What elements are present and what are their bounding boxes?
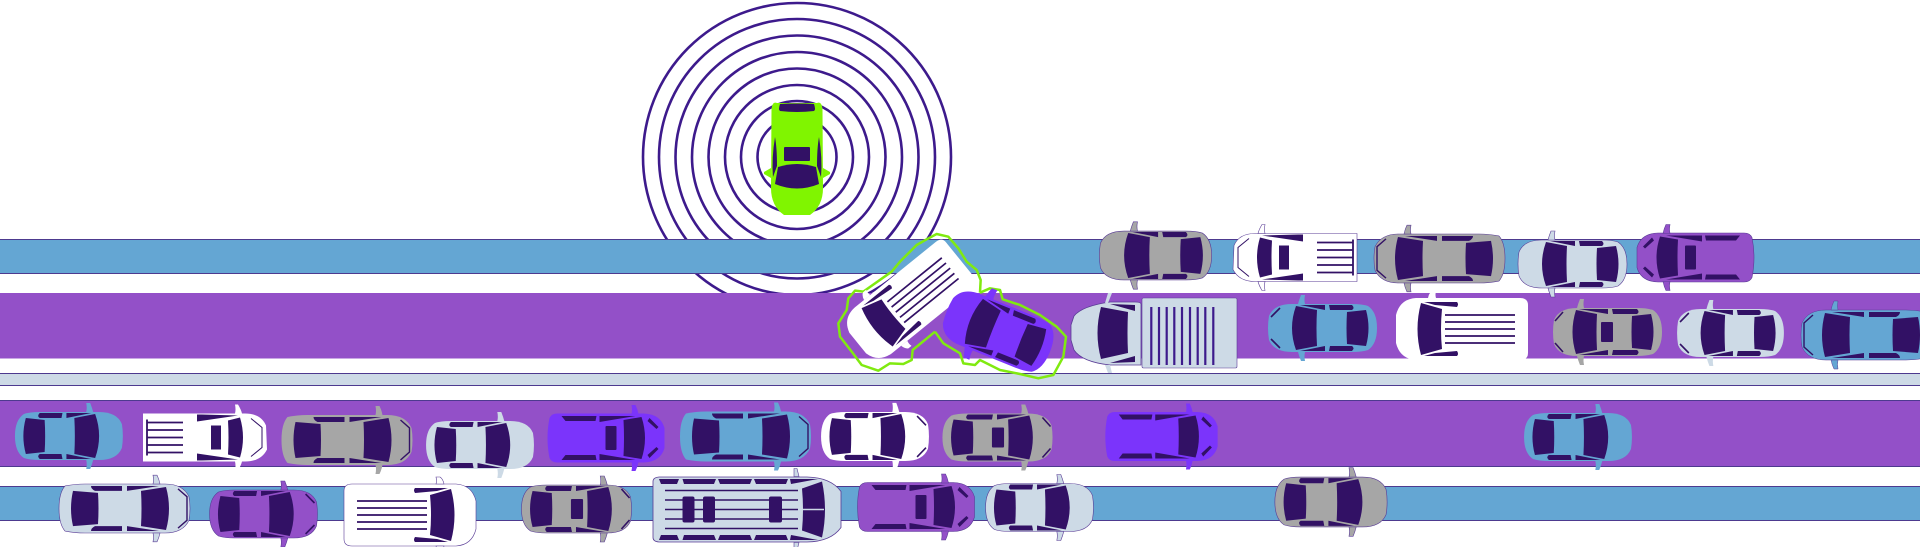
second lane: light sedan <box>1677 300 1784 366</box>
top blue lane: light sedan <box>1518 231 1627 297</box>
second lane: grey car with sunroof <box>1553 299 1662 365</box>
third lane: white pickup <box>143 404 267 470</box>
signal rings <box>643 3 951 311</box>
third lane: light sedan <box>426 412 534 478</box>
bottom lane: light sedan <box>986 474 1093 540</box>
bottom lane: grey sedan <box>1275 468 1387 536</box>
top blue lane: grey sedan <box>1099 222 1212 289</box>
third lane: bright purple van <box>548 405 664 471</box>
bottom lane: long passenger van <box>653 468 841 547</box>
second lane: white SUV <box>1396 291 1528 367</box>
top blue lane: grey SUV <box>1374 225 1505 292</box>
collision: white SUV <box>835 232 983 371</box>
delivery truck <box>1071 293 1237 373</box>
truck cab <box>1071 293 1141 373</box>
top blue lane: white pickup <box>1233 224 1357 290</box>
green car emitting signal <box>764 103 830 215</box>
third lane: grey car with sunroof <box>942 404 1053 470</box>
collision: bright purple car <box>934 277 1063 385</box>
bottom lane: white SUV <box>344 477 476 547</box>
second lane: blue SUV <box>1801 301 1920 369</box>
third lane: white sedan <box>821 403 929 470</box>
bottom lane: grey car with sunroof <box>521 476 632 542</box>
third lane: grey SUV <box>282 406 412 474</box>
road lanes <box>0 240 1920 520</box>
third lane: bright purple hatchback <box>1105 404 1218 470</box>
truck cargo box <box>1142 298 1237 368</box>
top blue lane: purple van <box>1637 224 1754 290</box>
bottom lane: light SUV <box>59 475 190 542</box>
bottom lane: purple van <box>858 474 974 540</box>
collision: green outlines around crashed cars <box>838 234 1066 378</box>
second lane: blue sedan <box>1268 295 1377 361</box>
bottom lane: purple sedan <box>210 481 317 547</box>
third lane: blue SUV <box>680 402 811 470</box>
third lane: blue sedan far right <box>1524 404 1632 470</box>
third lane: blue sedan <box>15 403 123 469</box>
